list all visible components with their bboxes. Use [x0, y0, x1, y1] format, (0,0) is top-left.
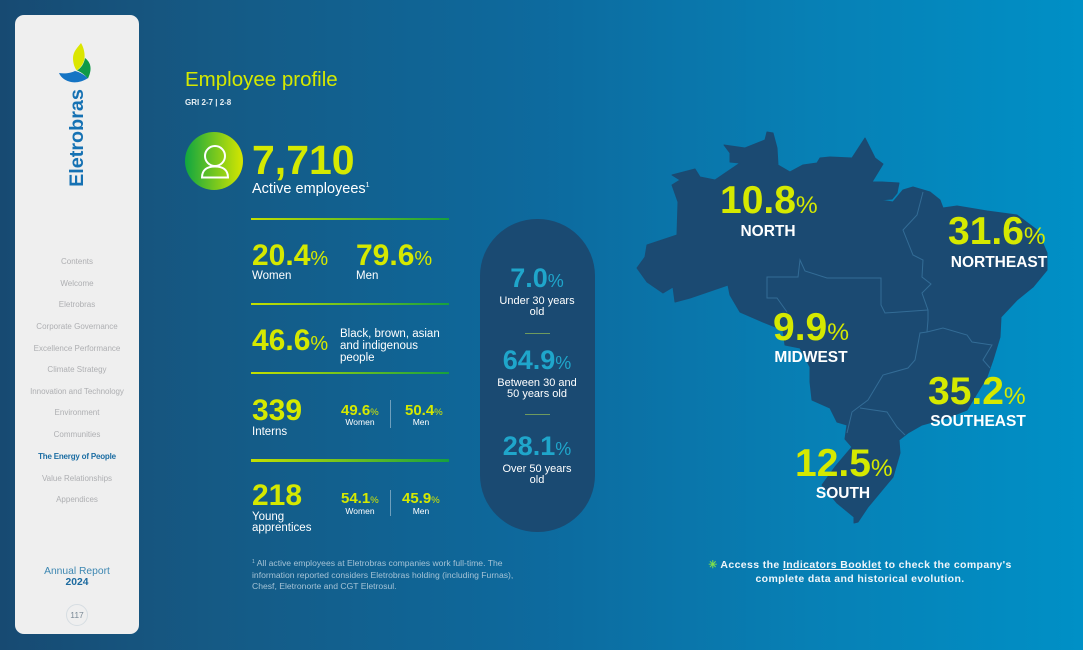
panel: sidebar navigation — [15, 15, 139, 634]
footnote: 1 All active employees at Eletrobras companies work full-time. The — [252, 558, 503, 568]
stat: young apprentices: 54.1% — [341, 490, 379, 507]
region: south: 12.5% — [795, 442, 893, 485]
age: under 30: 7.0% — [510, 263, 564, 293]
navigation menu: Excellence Performance — [34, 344, 120, 353]
region: south: SOUTH — [816, 485, 870, 502]
page number — [66, 604, 88, 626]
age: under 30 — [499, 263, 575, 318]
thick divider — [251, 459, 449, 462]
age: over 50: Over 50 years — [502, 463, 572, 475]
navigation menu: Contents — [61, 257, 93, 266]
navigation menu: Value Relationships — [42, 474, 112, 483]
age: over 50: 28.1% — [503, 431, 571, 461]
age: 30 to 50 — [497, 345, 577, 400]
region: north: NORTH — [740, 223, 796, 240]
region: northeast: 31.6% — [948, 210, 1046, 253]
annual report label: 2024 — [66, 577, 88, 588]
footnote: Chesf, Eletronorte and CGT Eletrosul. — [252, 581, 397, 591]
navigation menu: Climate Strategy — [47, 365, 107, 374]
stat: young apprentices: 218 — [252, 479, 302, 512]
region: northeast — [948, 210, 1048, 271]
navigation menu: Appendices — [56, 495, 98, 504]
stat: diversity: 46.6% — [252, 324, 328, 357]
stat: diversity: and indigenous — [340, 340, 418, 352]
stat: young apprentices: Young — [252, 511, 284, 523]
age: under 30: old — [530, 306, 544, 318]
region: north: 10.8% — [720, 179, 818, 222]
stat: young apprentices: apprentices — [252, 522, 311, 534]
stat: interns: 49.6% — [341, 402, 379, 419]
navigation menu: Environment — [55, 408, 99, 417]
navigation menu: Corporate Governance — [36, 322, 118, 331]
stat: men: 79.6% — [356, 239, 432, 272]
page number: 117 — [70, 610, 84, 620]
region: midwest: 9.9% — [773, 306, 849, 349]
icon: person in gradient circle — [185, 132, 243, 190]
navigation menu: Innovation and Technology — [30, 387, 124, 396]
stat: young apprentices: 45.9% — [402, 490, 440, 507]
logo wordmark: Eletrobras — [66, 89, 88, 187]
stat: young apprentices: Women — [345, 506, 375, 516]
navigation menu: The Energy of People — [38, 452, 116, 461]
stat: diversity: people — [340, 352, 375, 364]
panel: age groups pill — [480, 219, 595, 532]
title: Employee profile — [185, 68, 338, 91]
stat: interns: 50.4% — [405, 402, 443, 419]
stat: women: 20.4% — [252, 239, 328, 272]
stat: interns: 339 — [252, 394, 302, 427]
stat: men: Men — [356, 270, 378, 282]
navigation menu: Eletrobras — [59, 300, 95, 309]
annual report label — [44, 566, 110, 588]
age: over 50: old — [530, 474, 544, 486]
navigation menu: Welcome — [60, 279, 94, 288]
age: 30 to 50: 50 years old — [507, 388, 567, 400]
stat: young apprentices — [252, 479, 440, 534]
stat: interns: Men — [413, 417, 429, 427]
region: northeast: NORTHEAST — [951, 254, 1047, 271]
stat: diversity — [252, 324, 440, 364]
navigation menu — [30, 257, 124, 504]
age: 30 to 50: Between 30 and — [497, 377, 577, 389]
stat: young apprentices: Men — [413, 506, 429, 516]
divider — [251, 372, 449, 374]
callout: indicators booklet — [708, 559, 1012, 585]
footnote — [252, 558, 513, 591]
region: southeast: SOUTHEAST — [930, 413, 1026, 430]
stat: interns: Interns — [252, 426, 287, 438]
stat: women: Women — [252, 270, 291, 282]
stat: interns — [252, 394, 443, 438]
icon: Eletrobras logo — [59, 43, 91, 82]
region: southeast: 35.2% — [928, 370, 1026, 413]
divider — [251, 218, 449, 220]
annual report label: Annual Report — [44, 566, 110, 577]
total employees figure: 7,710 — [252, 137, 355, 183]
age: 30 to 50: 64.9% — [503, 345, 571, 375]
stat: interns: Women — [345, 417, 375, 427]
footnote: information reported considers Eletrobras holding (including Furnas), — [252, 570, 513, 580]
region: midwest: MIDWEST — [774, 349, 848, 366]
navigation menu: Communities — [54, 430, 100, 439]
age: over 50 — [502, 431, 572, 486]
age: under 30: Under 30 years — [499, 295, 575, 307]
callout: indicators booklet: ✳ Access the Indicators Booklet to check the company's — [708, 559, 1012, 571]
total employees label: Active employees1 — [252, 181, 370, 197]
divider — [251, 303, 449, 305]
callout: indicators booklet: complete data and historical evolution. — [755, 573, 965, 585]
stat: diversity: Black, brown, asian — [340, 328, 440, 340]
GRI reference: GRI 2-7 | 2-8 — [185, 98, 231, 107]
